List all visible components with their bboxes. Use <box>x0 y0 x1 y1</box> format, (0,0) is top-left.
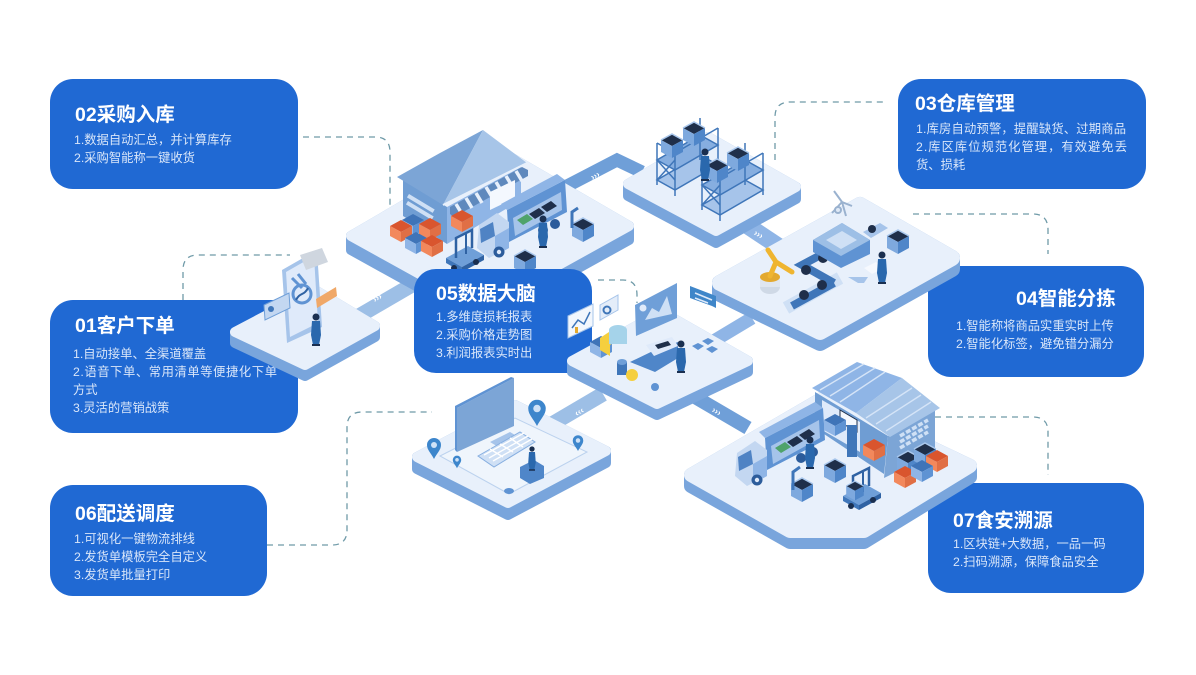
platform 05: data brain <box>568 283 748 415</box>
road: 04 to 05 <box>712 318 752 342</box>
seated operator <box>520 446 544 484</box>
card: 01 customer order <box>50 300 298 433</box>
card: 03 warehouse <box>898 79 1146 189</box>
card: 03 warehouse: 2.库区库位规范化管理，有效避免丢 <box>916 139 1127 154</box>
card: 07 food safety: 1.区块链+大数据，一品一码 <box>953 536 1106 551</box>
card: 06 delivery: 1.可视化一键物流排线 <box>74 531 195 546</box>
weighing scale <box>572 208 594 242</box>
speech bubble <box>690 286 716 308</box>
worker <box>538 216 548 248</box>
sensor <box>651 383 659 391</box>
warehouse building <box>812 362 940 478</box>
truck <box>477 174 567 258</box>
worker <box>700 148 710 181</box>
small crate <box>887 230 909 254</box>
card: 05 data brain: 1.多维度损耗报表 <box>436 309 532 324</box>
conveyor belt <box>786 250 840 308</box>
rack 2 <box>702 143 763 221</box>
platform 03: warehouse racks <box>628 118 796 243</box>
card: 01 customer order: 3.灵活的营销战策 <box>73 400 169 415</box>
phone <box>282 248 328 343</box>
data cubes <box>590 325 638 381</box>
card: 03 warehouse: 1.库房自动预警，提醒缺货、过期商品 <box>916 121 1126 136</box>
floating id card <box>264 293 290 320</box>
worker <box>805 436 815 469</box>
road: 03 to 04: ››› <box>752 228 765 241</box>
robot arm <box>760 250 792 294</box>
platform 01: customer ordering <box>235 248 375 376</box>
dashboard screen <box>635 283 677 336</box>
large monitor <box>455 377 520 452</box>
marker <box>504 488 514 494</box>
card: 02 purchasing: 02采购入库 <box>75 104 175 126</box>
sorting machine <box>813 223 888 268</box>
stacked crates <box>894 443 948 488</box>
card: 01 customer order: 1.自动接单、全渠道覆盖 <box>73 346 206 361</box>
crates by door <box>824 414 885 483</box>
card: 01 customer order: 01客户下单 <box>75 314 175 337</box>
card: 02 purchasing: 2.采购智能称一键收货 <box>74 150 195 165</box>
dashed leader: 02 <box>303 137 390 222</box>
weighing scale <box>791 467 813 502</box>
road: 02 to 03 <box>565 160 642 187</box>
road: 05 to 07: ››› <box>710 405 723 418</box>
road: 01 to 02: ››› <box>371 291 384 304</box>
analyst <box>676 340 686 373</box>
card: 06 delivery <box>50 485 267 596</box>
platform 02: purchasing warehouse <box>351 130 629 322</box>
worker <box>848 252 887 284</box>
drone <box>832 191 852 216</box>
card: 06 delivery: 2.发货单模板完全自定义 <box>74 549 207 564</box>
road: 02 to 03: ››› <box>589 169 601 182</box>
forklift <box>843 468 881 510</box>
keyboard map <box>478 432 535 467</box>
card: 02 purchasing <box>50 79 298 189</box>
platform 04: smart sorting <box>720 191 952 343</box>
dashed leader: 07 <box>935 417 1048 475</box>
platform 07: food traceability <box>691 362 970 542</box>
small cubes <box>692 338 718 353</box>
dashed leader: 04 <box>913 214 1048 254</box>
road: 01 to 02 <box>352 285 412 320</box>
route outline <box>440 418 587 494</box>
warehouse building <box>397 130 528 244</box>
card: 01 customer order: 方式 <box>73 382 98 397</box>
card: 07 food safety: 2.扫码溯源，保障食品安全 <box>953 554 1099 569</box>
customer figure <box>311 314 321 346</box>
card: 04 sorting <box>928 266 1144 377</box>
card: 07 food safety <box>928 483 1144 593</box>
card: 05 data brain: 2.采购价格走势图 <box>436 327 532 342</box>
card: 04 sorting: 04智能分拣 <box>1016 288 1116 310</box>
road: 03 to 04 <box>748 226 778 246</box>
console <box>630 337 678 372</box>
produce crate <box>514 250 536 274</box>
card: 06 delivery: 06配送调度 <box>75 502 175 525</box>
road: 05 to 07 <box>695 397 748 428</box>
dashed leader: 05 <box>598 280 637 303</box>
card: 01 customer order: 2.语音下单、常用清单等便捷化下单 <box>73 364 277 379</box>
truck <box>735 402 825 486</box>
card: 06 delivery: 3.发货单批量打印 <box>74 567 170 582</box>
dashed leader: 06 <box>267 412 432 545</box>
location pins <box>427 400 583 468</box>
card: 04 sorting: 2.智能化标签，避免错分漏分 <box>956 336 1114 351</box>
road: 05 to 06 <box>552 394 603 424</box>
card: 05 data brain <box>414 269 592 373</box>
rack 1 <box>657 118 718 196</box>
card: 03 warehouse: 货、损耗 <box>916 157 965 172</box>
chart tile <box>568 304 593 338</box>
card: 07 food safety: 07食安溯源 <box>953 509 1053 532</box>
card: 05 data brain: 3.利润报表实时出 <box>436 345 532 360</box>
road: 05 to 06: ‹‹‹ <box>573 405 586 418</box>
orange tag <box>316 287 337 308</box>
dashed leader: 03 <box>775 102 884 160</box>
dashed leader: 01 <box>183 255 290 300</box>
card: 03 warehouse: 03仓库管理 <box>915 92 1015 115</box>
platform 06: delivery scheduling <box>417 377 606 515</box>
card: 02 purchasing: 1.数据自动汇总，并计算库存 <box>74 132 232 147</box>
forklift <box>446 230 484 272</box>
card: 04 sorting: 1.智能称将商品实重实时上传 <box>956 318 1114 333</box>
card: 05 data brain: 05数据大脑 <box>436 283 536 305</box>
gauge tile <box>600 295 618 320</box>
crates near warehouse <box>390 210 473 257</box>
